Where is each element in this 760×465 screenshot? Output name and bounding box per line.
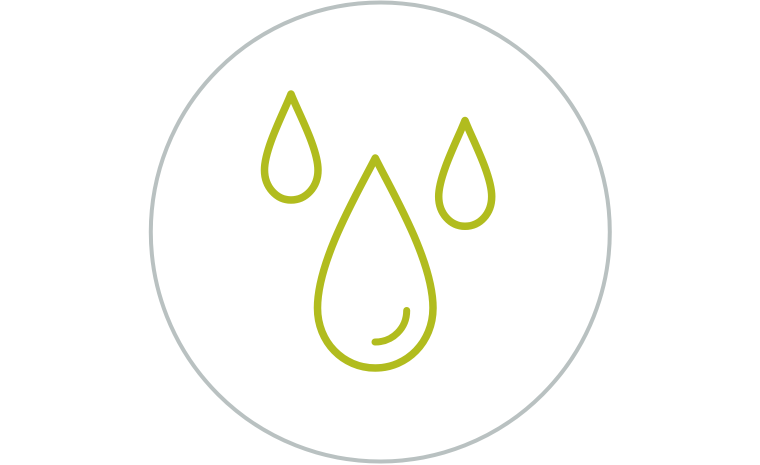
icon: small left drop bbox=[264, 94, 318, 200]
icon: small right drop bbox=[439, 120, 492, 226]
icon: large center drop bbox=[318, 158, 433, 368]
icon: water drops bbox=[264, 94, 492, 368]
icon: drop highlight bbox=[375, 310, 407, 342]
circle outline bbox=[151, 2, 610, 462]
